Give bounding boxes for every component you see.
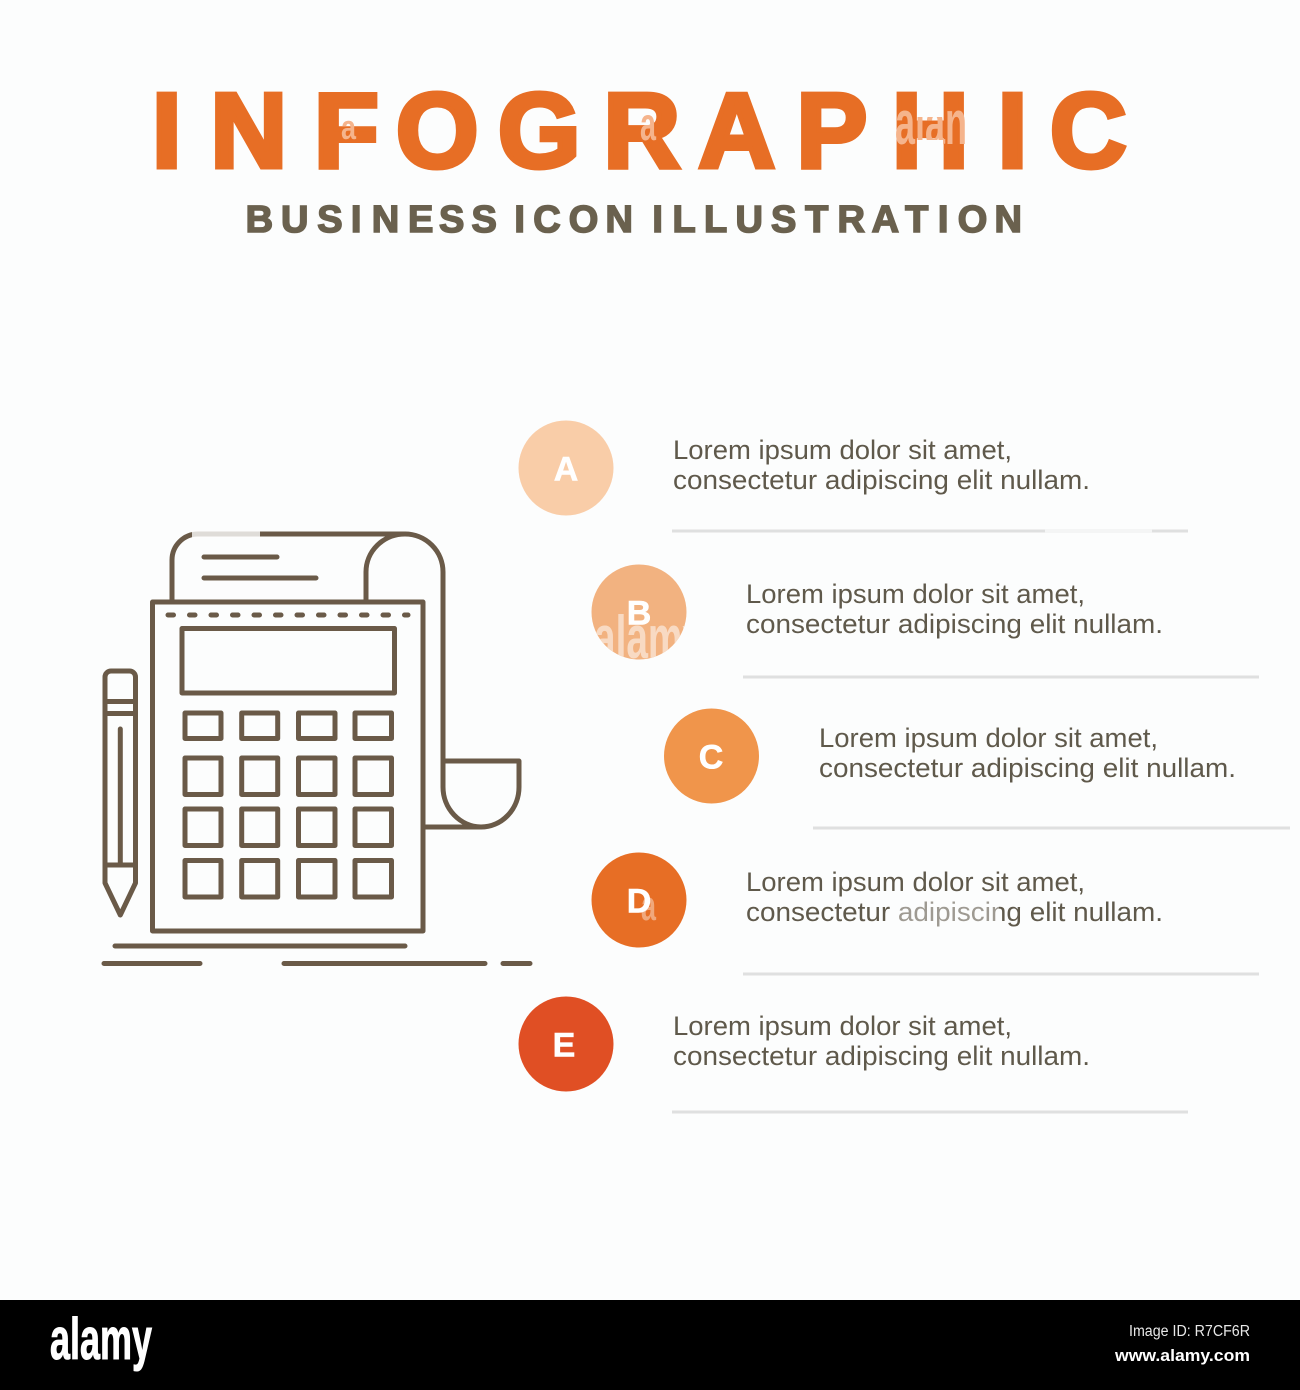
circle D	[592, 852, 686, 948]
icon: calculator with paper roll and pencil	[104, 534, 530, 964]
text C: Lorem ipsum dolor sit amet,	[819, 723, 1158, 753]
text A: Lorem ipsum dolor sit amet,	[673, 435, 1012, 465]
perforation dashes	[168, 612, 408, 618]
divider D	[743, 972, 1259, 976]
text D: Lorem ipsum dolor sit amet,	[746, 867, 1085, 897]
calculator screen	[182, 628, 394, 693]
step E	[518, 996, 1188, 1114]
subtitle: BUSINESS ICON ILLUSTRATION	[246, 199, 1022, 241]
text D: consectetur adipiscing elit nullam.	[746, 897, 1163, 927]
text E: consectetur adipiscing elit nullam.	[673, 1041, 1090, 1071]
step B	[592, 564, 1259, 678]
calculator buttons	[185, 713, 392, 897]
text C: consectetur adipiscing elit nullam.	[819, 753, 1236, 783]
calculator body	[152, 602, 423, 931]
letter E: E	[553, 1026, 575, 1064]
watermark on B: alamy	[594, 604, 704, 671]
circle A	[518, 420, 614, 516]
title watermark fragments: alan	[895, 89, 967, 158]
circle E	[518, 996, 614, 1092]
watermark on D: a	[641, 882, 656, 929]
image id: Image ID: R7CF6R	[1129, 1323, 1250, 1340]
footer bar	[0, 1300, 1300, 1390]
text B: Lorem ipsum dolor sit amet,	[746, 579, 1085, 609]
title watermark fragments: a	[640, 98, 656, 150]
website: www.alamy.com	[1114, 1346, 1250, 1365]
step C	[664, 708, 1290, 830]
text A: consectetur adipiscing elit nullam.	[673, 465, 1090, 495]
title watermark fragments	[342, 110, 965, 144]
alamy logo: alamy	[50, 1307, 152, 1372]
text E: Lorem ipsum dolor sit amet,	[673, 1011, 1012, 1041]
letter A: A	[554, 450, 578, 488]
divider A	[672, 530, 1188, 532]
ground lines	[104, 946, 530, 964]
divider B	[743, 676, 1259, 678]
letter D: D	[627, 882, 651, 920]
paper roll	[172, 534, 519, 827]
title: INFOGRAPHIC	[152, 72, 1127, 190]
circle C	[664, 708, 759, 804]
icon: pencil	[105, 671, 136, 915]
circle B	[592, 564, 686, 660]
text B: consectetur adipiscing elit nullam.	[746, 609, 1163, 639]
letter B: B	[627, 594, 651, 632]
step A	[518, 420, 1188, 532]
divider C	[813, 826, 1290, 830]
title watermark fragments: a	[341, 109, 357, 147]
divider E	[672, 1110, 1188, 1114]
letter C: C	[699, 738, 723, 776]
step D	[592, 852, 1259, 976]
